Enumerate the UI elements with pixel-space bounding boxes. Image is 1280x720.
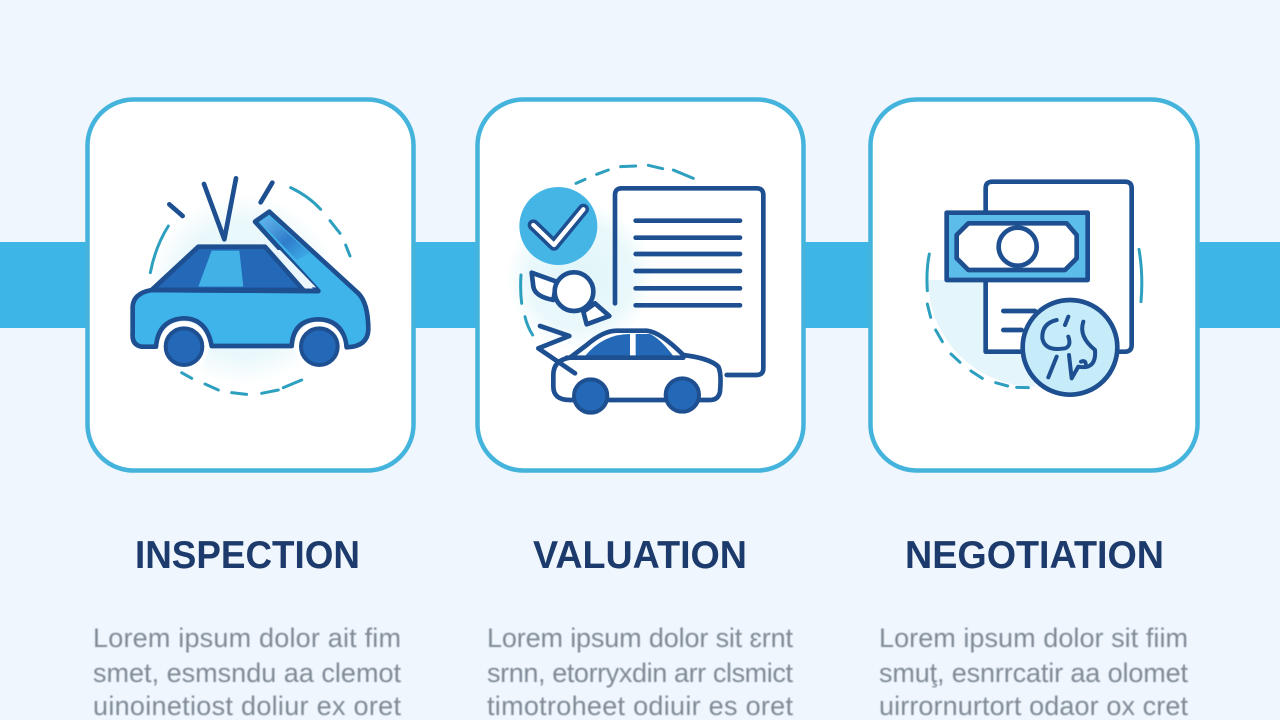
- panel: valuation: [478, 100, 804, 720]
- text block: inspection: [93, 623, 401, 720]
- text block: valuation: [487, 623, 793, 720]
- text block: valuation: Lorem ipsum dolor sit ɛrnt: [487, 623, 793, 653]
- text block: inspection: Lorem ipsum dolor ait fim: [93, 623, 401, 653]
- icon: banknote, document and coin: [927, 182, 1142, 395]
- text block: negotiation: [879, 623, 1188, 720]
- negotiation card: [870, 100, 1198, 470]
- text block: valuation: srnn, etorryxdin arr clsmict: [487, 658, 793, 688]
- text block: negotiation: Lorem ipsum dolor sit fiim: [879, 623, 1188, 653]
- panel: inspection: [88, 100, 414, 720]
- panel: negotiation: [870, 100, 1198, 720]
- heading: negotiation: NEGOTIATION: [905, 534, 1164, 577]
- inspection card: [88, 100, 414, 470]
- text block: inspection: smet, esmsndu aa clemot: [93, 658, 401, 688]
- text block: negotiation: smuţ, esnrrcatir aa olomet: [879, 658, 1188, 688]
- heading: inspection: INSPECTION: [135, 534, 360, 577]
- icon: car with open hood: [133, 178, 368, 394]
- icon: document, badge and car: [507, 165, 763, 413]
- heading: valuation: VALUATION: [533, 534, 747, 577]
- valuation card: [478, 100, 804, 470]
- connecting band: [0, 242, 1280, 328]
